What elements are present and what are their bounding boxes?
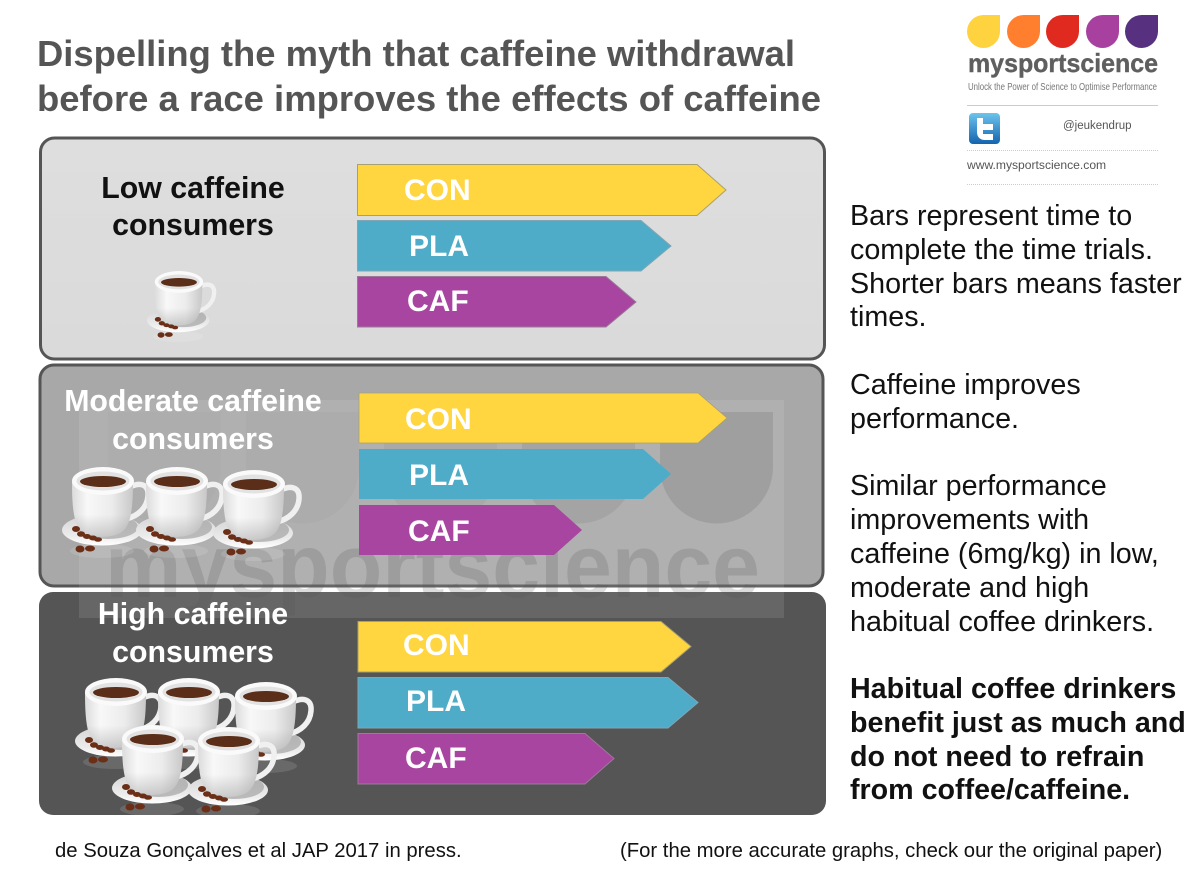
text block: conclusion: from coffee/caffeine.: [850, 774, 1130, 806]
text block: similar improvements: improvements with: [850, 504, 1089, 536]
bar: high PLA: [358, 678, 698, 728]
bar: low CON: CON: [404, 174, 471, 207]
bar: low CAF: CAF: [407, 285, 469, 318]
bar: moderate CAF: [359, 505, 582, 555]
icon: five coloured drops: [967, 15, 1158, 48]
icon: five coffee cups: [75, 678, 311, 818]
heading: moderate caffeine consumers: consumers: [112, 423, 274, 456]
bar: low PLA: PLA: [409, 230, 469, 263]
title: Dispelling the myth that caffeine withdrawal: [37, 33, 795, 74]
watermark: mysportscience logo: mysportscience: [105, 517, 760, 617]
logo: mysportscience: [966, 15, 1158, 184]
group: high panel contents: [75, 598, 698, 818]
bar: high CON: [358, 622, 691, 672]
text block: similar improvements: Similar performance: [850, 470, 1107, 502]
bar: high CAF: CAF: [405, 742, 467, 775]
icon: three coffee cups: [62, 467, 299, 561]
panel: low caffeine consumers: [40, 138, 824, 359]
text block: conclusion: do not need to refrain: [850, 741, 1144, 773]
heading: high caffeine consumers: consumers: [112, 636, 274, 669]
text block: conclusion: [850, 673, 1186, 806]
bar: moderate CAF: CAF: [408, 515, 470, 548]
heading: moderate caffeine consumers: Moderate caffeine: [64, 385, 322, 418]
text block: similar improvements: [850, 470, 1159, 638]
panel: high caffeine consumers: [39, 592, 826, 815]
text block: similar improvements: habitual coffee drinkers.: [850, 606, 1154, 638]
heading: low caffeine consumers: Low caffeine: [101, 172, 285, 205]
heading: high caffeine consumers: [98, 598, 288, 669]
heading: high caffeine consumers: High caffeine: [98, 598, 288, 631]
watermark: mysportscience logo: [79, 400, 784, 618]
website: www.mysportscience.com: [966, 158, 1106, 172]
text block: explanation of bars: Bars represent time to: [850, 200, 1132, 232]
text block: caffeine improves performance: Caffeine improves: [850, 369, 1081, 401]
text block: caffeine improves performance: performance.: [850, 403, 1019, 435]
text block: similar improvements: moderate and high: [850, 572, 1089, 604]
text block: conclusion: Habitual coffee drinkers: [850, 673, 1176, 705]
heading: low caffeine consumers: [101, 172, 285, 242]
title: before a race improves the effects of caffeine: [37, 78, 821, 119]
text block: similar improvements: caffeine (6mg/kg) in low,: [850, 538, 1159, 570]
bar: moderate CON: CON: [405, 403, 472, 436]
bar: high CON: CON: [403, 629, 470, 662]
bar: low CON: [358, 164, 726, 216]
bar: low PLA: [358, 220, 671, 271]
title: [37, 33, 821, 119]
bar: moderate PLA: PLA: [409, 459, 469, 492]
bar: high CAF: [358, 734, 614, 784]
citation: de Souza Gonçalves et al JAP 2017 in press.: [55, 840, 462, 862]
text block: explanation of bars: Shorter bars means faster: [850, 268, 1182, 300]
icon: twitter: [969, 113, 1000, 144]
bar: high PLA: PLA: [406, 685, 466, 718]
bar: low CAF: [358, 276, 636, 327]
text block: explanation of bars: complete the time trials.: [850, 234, 1153, 266]
heading: low caffeine consumers: consumers: [112, 209, 274, 242]
logo wordmark: mysportscience: [968, 48, 1158, 78]
panel: moderate caffeine consumers: [40, 365, 823, 586]
text block: caffeine improves performance: [850, 369, 1081, 435]
icon: one coffee cup: [147, 271, 214, 342]
group: moderate panel contents: [62, 385, 727, 561]
bar: moderate CON: [359, 393, 727, 443]
text block: explanation of bars: [850, 200, 1182, 333]
text block: conclusion: benefit just as much and: [850, 707, 1186, 739]
text block: explanation of bars: times.: [850, 301, 927, 333]
twitter handle: @jeukendrup: [1063, 120, 1132, 132]
bar: moderate PLA: [359, 449, 671, 499]
heading: moderate caffeine consumers: [64, 385, 322, 456]
note: original paper: (For the more accurate graphs, check our the original paper): [620, 840, 1162, 862]
